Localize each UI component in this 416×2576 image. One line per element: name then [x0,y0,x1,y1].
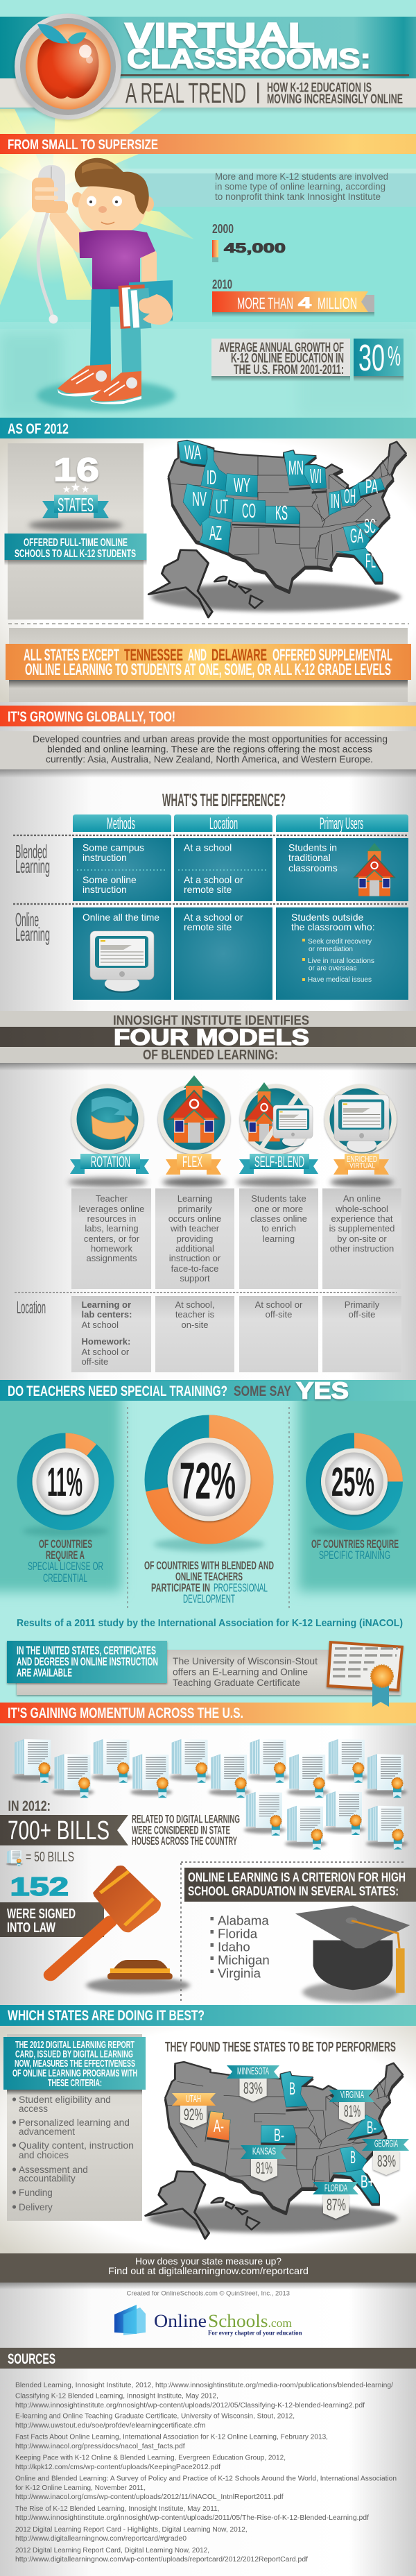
table headers: Location [209,814,238,833]
stat: 2010 ribbon: 2010 [212,278,232,291]
model columns: descriptions: instruction or [169,1253,221,1263]
callout: Kansas 81%: KANSAS [252,2145,276,2158]
model columns: descriptions: by on-site or [337,1234,387,1244]
background: bills section [0,1723,416,2005]
text block: source list: 2012 Digital Learning Report Card, Digital Learning Now, 2012, [15,2547,209,2554]
panel: certificates and degrees: Teaching Graduate Certificate [173,1677,300,1688]
stat: average annual growth 30% [211,337,404,382]
icon: computer monitor [90,931,154,993]
stat: 152 signed into law: 152 [10,1873,69,1901]
text block: source list: for K-12 Online Learning, November 2011, [15,2484,146,2492]
callout: Georgia 83% [362,2138,409,2175]
model columns: location: At school [82,1320,119,1330]
model badge: enriched virtual: ENRICHED [347,1154,377,1164]
heading: four models of blended learning [0,1011,416,1071]
map labels: grades: B [350,2148,356,2167]
panel: report card criteria: THESE CRITERIA: [48,2078,102,2089]
panel: report card criteria: CARD, ISSUED BY DIGITAL LEARNING [15,2049,133,2061]
callout: Georgia 83%: 83% [377,2152,396,2171]
model columns: descriptions: providing [177,1234,213,1244]
list: criteria: advancement [19,2126,75,2137]
panel: certificates and degrees: AND DEGREES IN ONLINE INSTRUCTION [17,1655,158,1668]
blended text: instruction [83,852,127,863]
list: states: Alabama [218,1913,269,1928]
list: criteria: Quality content, instruction [19,2140,134,2151]
model columns: descriptions: to enrich [261,1223,296,1234]
header band [0,17,416,114]
background: map section [0,438,416,706]
captions: donut charts: PARTICIPATE IN [151,1581,210,1594]
blended text [83,842,338,895]
captions: donut charts: PROFESSIONAL [214,1581,268,1594]
list: criteria: Student eligibility and [19,2095,111,2105]
online text [83,912,375,932]
callout: Virginia 81%: VIRGINIA [340,2089,364,2101]
map labels: state abbreviations: ID [207,467,216,489]
map labels: state abbreviations: AZ [209,522,222,545]
donut chart: 25% [311,1440,397,1537]
blended text: traditional [288,852,331,863]
online text: At a school or [184,912,243,923]
section heading: which states are doing it best: WHICH STATES ARE DOING IT BEST? [8,2008,205,2024]
model columns: descriptions: An online [343,1193,381,1204]
stat: 2010 ribbon: MORE THAN [237,294,293,312]
captions: donut charts: OF COUNTRIES WITH BLENDED AND [144,1559,274,1572]
callout: all states except Tennessee and Delaware: DELAWARE [211,646,267,665]
panel: certificates and degrees: The University of Wisconsin-Stout [173,1655,318,1666]
model columns: descriptions: homework [91,1243,132,1254]
section heading: gaining momentum [0,1703,416,1723]
callout: Florida 87% [313,2182,358,2219]
model badge: enriched virtual: VIRTUAL [349,1161,375,1170]
donut chart: 11% [22,1440,108,1537]
model columns: descriptions: experience that [331,1213,393,1224]
donut chart: 25%: 25% [331,1460,374,1505]
list: states: Michigan [218,1953,270,1968]
section heading: which states are doing it best [0,2005,416,2026]
banner: how does your state measure up [0,2253,416,2289]
map labels: grades: B- [274,2126,284,2145]
logo: OnlineSchools.com: Schools [208,2311,268,2331]
map labels: state abbreviations [184,442,378,572]
captions: donut charts: REQUIRE A [46,1549,85,1562]
map labels: state abbreviations: OH [344,486,356,508]
strip: offered full-time online schools: SCHOOLS TO ALL K-12 STUDENTS [15,548,136,560]
model columns: descriptions [71,1188,401,1289]
callout: all states except Tennessee and Delaware: TENNESSEE [124,646,183,665]
text block: source list: Blended Learning, Innosight Institute, 2012, http://www.innosightinstitute.org/media-room/publications/blended-learning/ [15,2382,393,2389]
model columns: descriptions: centers, or for [84,1234,140,1244]
model columns: location: off-site [82,1356,108,1367]
online text: Online all the time [83,912,159,923]
icon: apple badge [14,14,122,121]
text block: developed countries: currently: Asia, Australia, New Zealand, North America, and Western Europe. [46,753,373,765]
stat: 2000 students: 45,000 [224,241,286,256]
list: criteria: Delivery [19,2202,53,2212]
list: criteria: Funding [19,2187,53,2198]
callout: Utah 92%: 92% [184,2106,203,2124]
stat: average annual growth 30%: THE U.S. FROM 2001-2011: [234,363,344,377]
model columns: descriptions: learning [263,1234,295,1244]
model columns: descriptions: resources in [87,1213,136,1224]
map labels: state abbreviations: MN [288,457,304,479]
section heading: do teachers need special training [0,1378,416,1404]
section heading: from small to supersize: FROM SMALL TO SUPERSIZE [8,137,158,153]
model columns: location: At school or [255,1299,303,1310]
model columns: location: Location [17,1298,46,1317]
map labels: state abbreviations: IN [331,491,340,513]
model columns: location: lab centers: [82,1309,132,1320]
text block: source list: Online and Blended Learning: A Survey of Policy and Practice of K-12 Schools Around the World, International Association [15,2475,397,2483]
cells [73,838,408,1000]
list: states [211,1913,270,1981]
heading: what's the difference: WHAT'S THE DIFFERENCE? [162,790,286,810]
map labels: state abbreviations: SC [364,515,376,538]
callout: Utah 92%: UTAH [186,2093,201,2105]
model badge: flex: FLEX [182,1153,202,1170]
panel: report card criteria: OF ONLINE LEARNING PROGRAMS WITH [12,2068,137,2079]
text block: source list: Keeping Pace with K-12 Online & Blended Learning, Evergreen Education Group, 2012, [15,2455,286,2462]
model columns: descriptions: one or more [254,1204,303,1214]
title [125,16,371,74]
stat: 700+ bills [0,1798,240,1848]
text block: source list: 2012 Digital Learning Report Card - Highlights, Digital Learning Now, 2012, [15,2526,248,2534]
model badge: self-blend: SELF-BLEND [254,1153,304,1170]
bullet list: who: or remediation [309,946,353,953]
table: blended vs online learning [13,814,408,1000]
model columns: descriptions: labs, learning [85,1223,139,1234]
blended text: instruction [83,884,127,895]
panel: report card criteria [3,2034,146,2221]
donut chart: 11%: 11% [47,1460,83,1505]
icon: graduation cap [295,1906,410,2003]
callout: Florida 87%: 87% [327,2196,346,2215]
text block: intro: to nonprofit think tank Innosight Institute [215,191,381,202]
icon: certificate with medal [327,1641,404,1707]
blended text: remote site [184,884,232,895]
text block: developed countries: Developed countries and urban areas provide the most opportunities for accessing [33,733,388,744]
model columns: descriptions: with teacher [170,1223,220,1234]
map labels: state abbreviations: CO [242,500,256,522]
panel: 16 states [4,443,147,620]
stat: 700+ bills: IN 2012: [8,1798,51,1814]
model columns: location: Homework: [82,1336,130,1347]
model badge: self-blend [236,1082,318,1186]
table: blended vs online learning: Blended [15,841,47,862]
section heading: as of 2012: AS OF 2012 [8,421,69,437]
text block: source list: Fast Facts About Online Learning, International Association for K-12 Online Learning, February 2013, [15,2434,328,2441]
model columns: descriptions: classes online [250,1213,307,1224]
pictogram: 14 bills, each representing 50 [12,1739,408,1850]
stat: 2010 ribbon: 4 [298,294,312,312]
map labels: grades [214,2079,376,2192]
model columns: descriptions: Students take [251,1193,306,1204]
section heading: do teachers need special training: YES [296,1378,349,1404]
callout: Kansas 81%: 81% [256,2159,272,2178]
stat: 700+ bills: WERE CONSIDERED IN STATE [132,1825,230,1837]
online text: remote site [184,921,232,932]
captions: donut charts: OF COUNTRIES [39,1537,92,1551]
callout: Minnesota 83%: MINNESOTA [237,2065,269,2077]
stars: ★ [70,481,81,494]
text block: source list: http://www.digitallearningnow.com/reportcard/#grade0 [15,2535,187,2543]
icon: schoolhouse [354,843,395,896]
heading: four models of blended learning: FOUR MODELS [114,1025,309,1050]
background: credits section [0,2283,416,2348]
background: gray gradient for difference table and models [0,702,416,1380]
callout: Virginia 81%: 81% [344,2102,361,2121]
map labels: grades: B- [367,2118,376,2138]
panel: certificates and degrees: IN THE UNITED STATES, CERTIFICATES [17,1644,156,1657]
map labels: state abbreviations: PA [365,476,378,498]
online text: the classroom who: [291,921,375,932]
model columns: location [17,1296,401,1372]
model columns: descriptions: assignments [87,1253,137,1263]
callout: Florida 87%: FLORIDA [324,2183,347,2194]
stat: 700+ bills: 700+ BILLS [8,1816,110,1845]
number 16: 16 [53,451,99,488]
callout: Minnesota 83%: 83% [243,2079,263,2098]
map labels: grades: B+ [361,2172,374,2192]
text block: source list: http://www.innosightinstitute.org/innosight/wp-content/uploads/2011/05/The-Rise-of-K-12-Blended-Learning.pdf [15,2514,369,2522]
map labels: state abbreviations: GA [350,525,363,547]
stat: 152 signed into law: WERE SIGNED [7,1907,76,1922]
table headers: Methods [107,814,135,833]
row labels: Online [15,909,39,930]
map labels: state abbreviations: WA [184,442,201,464]
table: blended vs online learning: Learning [15,855,50,877]
map labels: state abbreviations: FL [365,550,376,572]
blended text: At a school [184,842,232,853]
blended text: classrooms [288,862,338,873]
list: states: Idaho [218,1940,250,1954]
model badge: enriched virtual [324,1084,397,1186]
background: header and intro section [0,0,416,418]
stat: 152 signed into law: INTO LAW [7,1920,55,1936]
stat: 2000 students: 2000 [212,222,234,236]
list: states: Virginia [218,1966,261,1981]
legend: one icon equals 50 bills [6,1850,74,1866]
text block: developed countries [0,731,416,778]
panel: graduation criterion [181,1862,416,2003]
stat: average annual growth 30%: K-12 ONLINE EDUCATION IN [231,351,344,366]
table headers [73,814,408,833]
ribbon: states: STATES [58,494,94,515]
text block: source list: http://www.inacol.org/cms/wp-content/uploads/2012/11/iNACOL_IntnlReport2011.pdf [15,2493,284,2501]
panel: report card criteria: NOW, MEASURES THE EFFECTIVENESS [15,2058,135,2070]
stat: average annual growth 30%: % [388,341,401,372]
section heading: as of 2012 [0,418,416,438]
panel: certificates and degrees [7,1641,401,1695]
blended text: Students in [288,842,337,853]
title: CLASSROOMS: [127,44,371,74]
model columns: location: At school, [175,1299,215,1310]
ribbon: states [42,494,109,518]
text block: intro [215,171,388,202]
stars: ★ [81,484,89,495]
bullet list: who [302,938,374,984]
model columns: location: on-site [181,1320,209,1330]
bullet list: who: or are overseas [309,964,356,973]
map: top performing states [146,2062,403,2239]
text block: source list: http://kpk12.com/cms/wp-content/uploads/KeepingPace2012.pdf [15,2464,220,2471]
callout: Minnesota 83% [227,2065,279,2101]
stars [62,481,89,495]
callout: Utah 92% [172,2093,216,2128]
bullet list: who: Seek credit recovery [308,938,372,946]
panel: certificates and degrees: offers an E-Learning and Online [173,1666,308,1678]
model columns: descriptions: additional [175,1243,214,1254]
callout: Virginia 81% [329,2089,374,2124]
list: criteria: access [19,2104,48,2114]
captions: donut charts: CREDENTIAL [43,1571,87,1585]
map labels: state abbreviations: WY [234,475,250,497]
map labels: state abbreviations: UT [216,496,228,518]
captions: donut charts: DEVELOPMENT [183,1592,235,1605]
text block: intro: in some type of online learning, according [215,182,385,191]
panel: certificates and degrees: ARE AVAILABLE [17,1666,72,1679]
text block: source list: E-learning and Online Teaching Graduate Certificate, University of Wisconsin, Stout, 2012, [15,2413,295,2421]
background: teacher training section [0,1387,416,1703]
list: states: Florida [218,1927,258,1941]
text block: source list: http://www.digitallearningnow.com/wp-content/uploads/reportcard/2012/2012ReportCard.pdf [15,2556,308,2564]
blended text: At a school or [184,874,243,885]
legend: one icon equals 50 bills: = 50 BILLS [26,1850,74,1865]
banner: how does your state measure up: Find out at digitallearningnow.com/reportcard [108,2265,309,2276]
list: criteria: Assessment and [19,2165,88,2175]
stat: 700+ bills: HOUSES ACROSS THE COUNTRY [132,1835,237,1848]
text block: source list: The Rise of K-12 Blended Learning, Innosight Institute, May 2011, [15,2505,219,2513]
logo: OnlineSchools.com: For every chapter of your education [208,2330,302,2337]
title: VIRTUAL [125,16,315,55]
stat: average annual growth 30%: 30 [358,337,385,379]
section heading: growing globally [0,706,416,726]
captions: donut charts [28,1537,399,1605]
background: sources [0,2369,416,2576]
text block: source list: http://www.uwstout.edu/soe/profdev/elearningcertificate.cfm [15,2422,206,2430]
model badge: flex [158,1075,230,1186]
model columns: descriptions: other instruction [330,1243,394,1254]
callout: Kansas 81% [241,2145,286,2181]
section heading: do teachers need special training: DO TEACHERS NEED SPECIAL TRAINING? [8,1383,227,1399]
model columns: descriptions: occurs online [168,1213,221,1224]
model columns: location: At school or [82,1347,130,1357]
blended text: Some online [83,874,137,885]
model columns: descriptions: whole-school [335,1204,388,1214]
logo: OnlineSchools.com [114,2305,302,2337]
model columns: location: teacher is [175,1309,215,1320]
model columns: descriptions: primarily [177,1204,212,1214]
row labels [15,841,50,945]
logo: OnlineSchools.com: Online [154,2311,207,2331]
banner: how does your state measure up: How does your state measure up? [135,2255,281,2267]
panel: report card criteria: THE 2012 DIGITAL LEARNING REPORT [15,2040,135,2051]
section heading: growing globally: IT'S GROWING GLOBALLY, TOO! [8,709,175,725]
illustration: boy holding mouse and books [32,158,175,411]
captions: donut charts: ONLINE TEACHERS [175,1570,243,1583]
map labels: grades: B [289,2079,295,2099]
text block: intro: More and more K-12 students are involved [215,171,388,182]
model columns: descriptions: face-to-face [171,1263,218,1274]
model columns: location: off-site [349,1309,375,1320]
callout: all states except Tennessee and Delaware: ALL STATES EXCEPT [24,646,119,665]
map labels: state abbreviations: WI [310,466,322,488]
model columns: descriptions: Teacher [96,1193,128,1204]
model badge: rotation: ROTATION [91,1153,130,1170]
model columns: descriptions: support [180,1273,210,1283]
text block: developed countries: blended and online learning. These are the regions offering the most access [47,744,372,755]
model columns: descriptions: leverages online [79,1204,144,1214]
callout: all states except Tennessee and Delaware [6,628,411,702]
subtitle: A REAL TREND [125,77,246,109]
map labels: state abbreviations: KS [275,502,288,524]
donut chart: 72% [154,1426,265,1551]
heading: four models of blended learning: OF BLENDED LEARNING: [143,1048,278,1063]
model columns: descriptions: is supplemented [329,1223,395,1234]
section heading: sources: SOURCES [8,2351,55,2367]
stat: 2010 ribbon [212,278,374,317]
map labels: state abbreviations: NV [192,488,207,511]
credit line: Created for OnlineSchools.com © QuinStreet, Inc., 2013 [126,2290,290,2298]
model columns: location: off-site [266,1309,292,1320]
list: criteria: and choices [19,2150,69,2160]
blended text: Some campus [83,842,144,853]
model columns: location: Primarily [345,1299,380,1310]
model columns: location: Learning or [82,1299,131,1310]
bullet list: who: Live in rural locations [308,957,374,965]
background: report card section [0,2026,416,2253]
online text: Students outside [291,912,364,923]
text block: source list: http://www.inacol.org/press/docs/nacol_fast_facts.pdf [15,2443,185,2450]
section heading: do teachers need special training: SOME SAY [234,1383,291,1399]
section heading: sources [0,2348,416,2369]
strip: offered full-time online schools [4,534,147,565]
list: criteria: Personalized learning and [19,2117,130,2128]
list: criteria [12,2095,134,2212]
map: 16 states with full-time online schools [148,441,406,617]
stat: 2000 students [212,222,286,262]
logo: OnlineSchools.com: .com [268,2317,292,2330]
heading: four models of blended learning: INNOSIGHT INSTITUTE IDENTIFIES [113,1014,309,1028]
text block: source list: http://www.innosightinstitute.org/nnosight/wp-content/uploads/2012/05/Classifying-K-12-blended-learning2.pdf [15,2402,365,2409]
model columns: descriptions: Learning [177,1193,212,1204]
map labels: grades: A- [214,2117,224,2136]
bullet list: who: Have medical issues [308,976,372,984]
stars: ★ [62,484,71,495]
text block: source list [15,2382,397,2564]
callout: all states except Tennessee and Delaware: AND [188,646,207,665]
text block: source list: Classifying K-12 Blended Learning, Innosight Institute, May 2012, [15,2393,218,2400]
strip: offered full-time online schools: OFFERED FULL-TIME ONLINE [24,537,128,549]
captions: donut charts: SPECIAL LICENSE OR [28,1560,103,1573]
model badge: rotation [68,1084,149,1186]
icon: gavel [51,1866,190,1994]
table: blended vs online learning: Learning [15,923,50,945]
stat: 700+ bills: RELATED TO DIGITAL LEARNING [132,1814,240,1826]
list: criteria: accountability [19,2173,76,2184]
stat: 2010 ribbon: MILLION [318,294,357,312]
section heading: from small to supersize [0,134,416,154]
section heading: gaining momentum: IT'S GAINING MOMENTUM ACROSS THE U.S. [8,1705,243,1721]
donut chart: 72%: 72% [180,1452,236,1510]
stat: 152 signed into law [0,1873,104,1937]
